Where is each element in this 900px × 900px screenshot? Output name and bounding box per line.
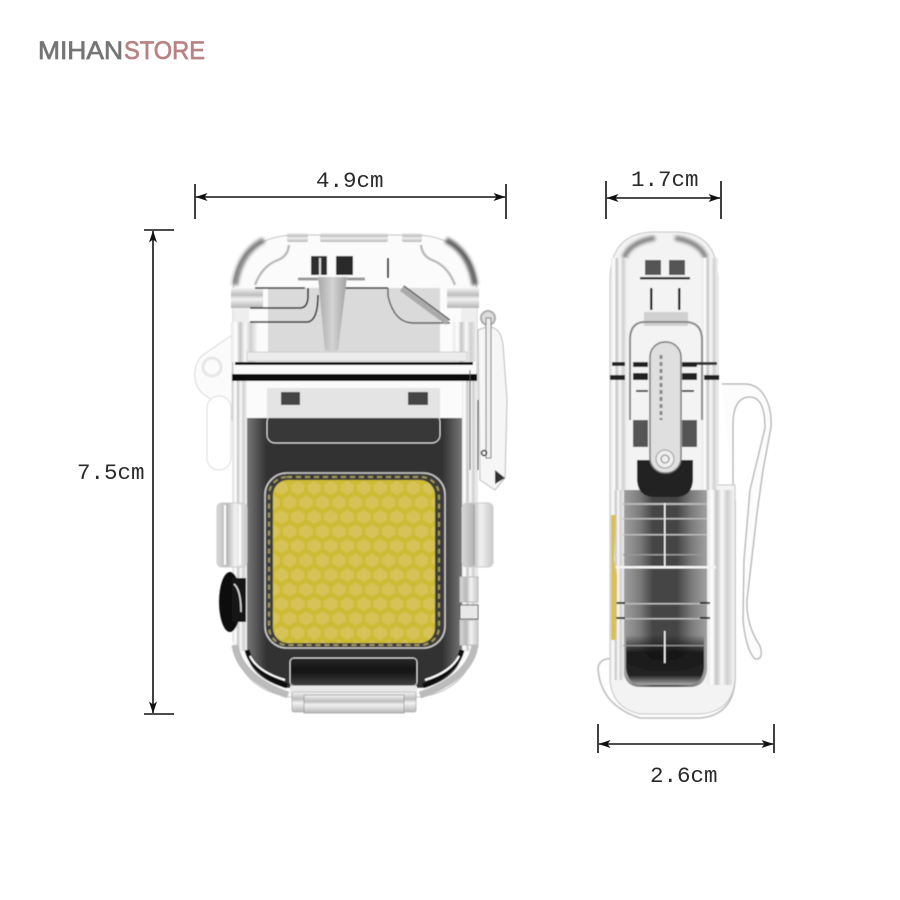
top dome shading <box>611 238 718 498</box>
front view of lighter <box>195 233 507 713</box>
COB LED yellow light <box>273 480 435 643</box>
metal belt clip seen from front <box>470 311 507 490</box>
outer silver bands and ribs on side body <box>611 490 734 685</box>
dimension: height 7.5cm: 7.5cm <box>77 460 145 486</box>
dark body side <box>623 490 707 687</box>
right side button <box>462 503 493 567</box>
left side lug <box>195 335 232 470</box>
black collar around pill <box>637 460 693 497</box>
dimension: width 4.9cm <box>195 168 506 219</box>
logo: MihanStore: STORE <box>124 37 205 65</box>
side case <box>610 232 735 714</box>
dimension: thickness 1.7cm <box>606 167 721 219</box>
yellow LED edge <box>611 515 617 640</box>
logo: MihanStore <box>38 37 205 65</box>
black seal stripes <box>610 362 719 392</box>
lower corners <box>235 645 475 695</box>
arc electrodes <box>298 256 389 279</box>
side view of lighter <box>598 232 771 718</box>
electrode nozzle <box>318 277 347 351</box>
left side button <box>217 503 247 567</box>
dimension: width 4.9cm: 4.9cm <box>316 168 384 194</box>
bottom clasp <box>290 658 417 713</box>
belt clip <box>722 384 771 659</box>
center clip pill <box>650 342 681 473</box>
right side ribs <box>460 577 478 645</box>
black battery body <box>247 414 462 688</box>
dimension: thickness 1.7cm: 1.7cm <box>631 167 699 193</box>
transparent case <box>231 233 479 697</box>
dark lower gradient <box>626 635 704 685</box>
dimension: thickness with clip 2.6cm <box>598 724 774 789</box>
seal lines <box>232 362 477 381</box>
dimension: thickness with clip 2.6cm: 2.6cm <box>650 763 718 789</box>
dark blocks <box>633 420 697 447</box>
dimension: height 7.5cm <box>77 230 174 714</box>
bottom hook <box>598 500 735 718</box>
black lanyard knob <box>219 572 246 632</box>
window with tabs <box>267 388 440 418</box>
logo: MihanStore: MIHAN <box>38 37 123 65</box>
fuel chamber panel <box>247 286 467 361</box>
COB LED bezel <box>265 473 445 648</box>
